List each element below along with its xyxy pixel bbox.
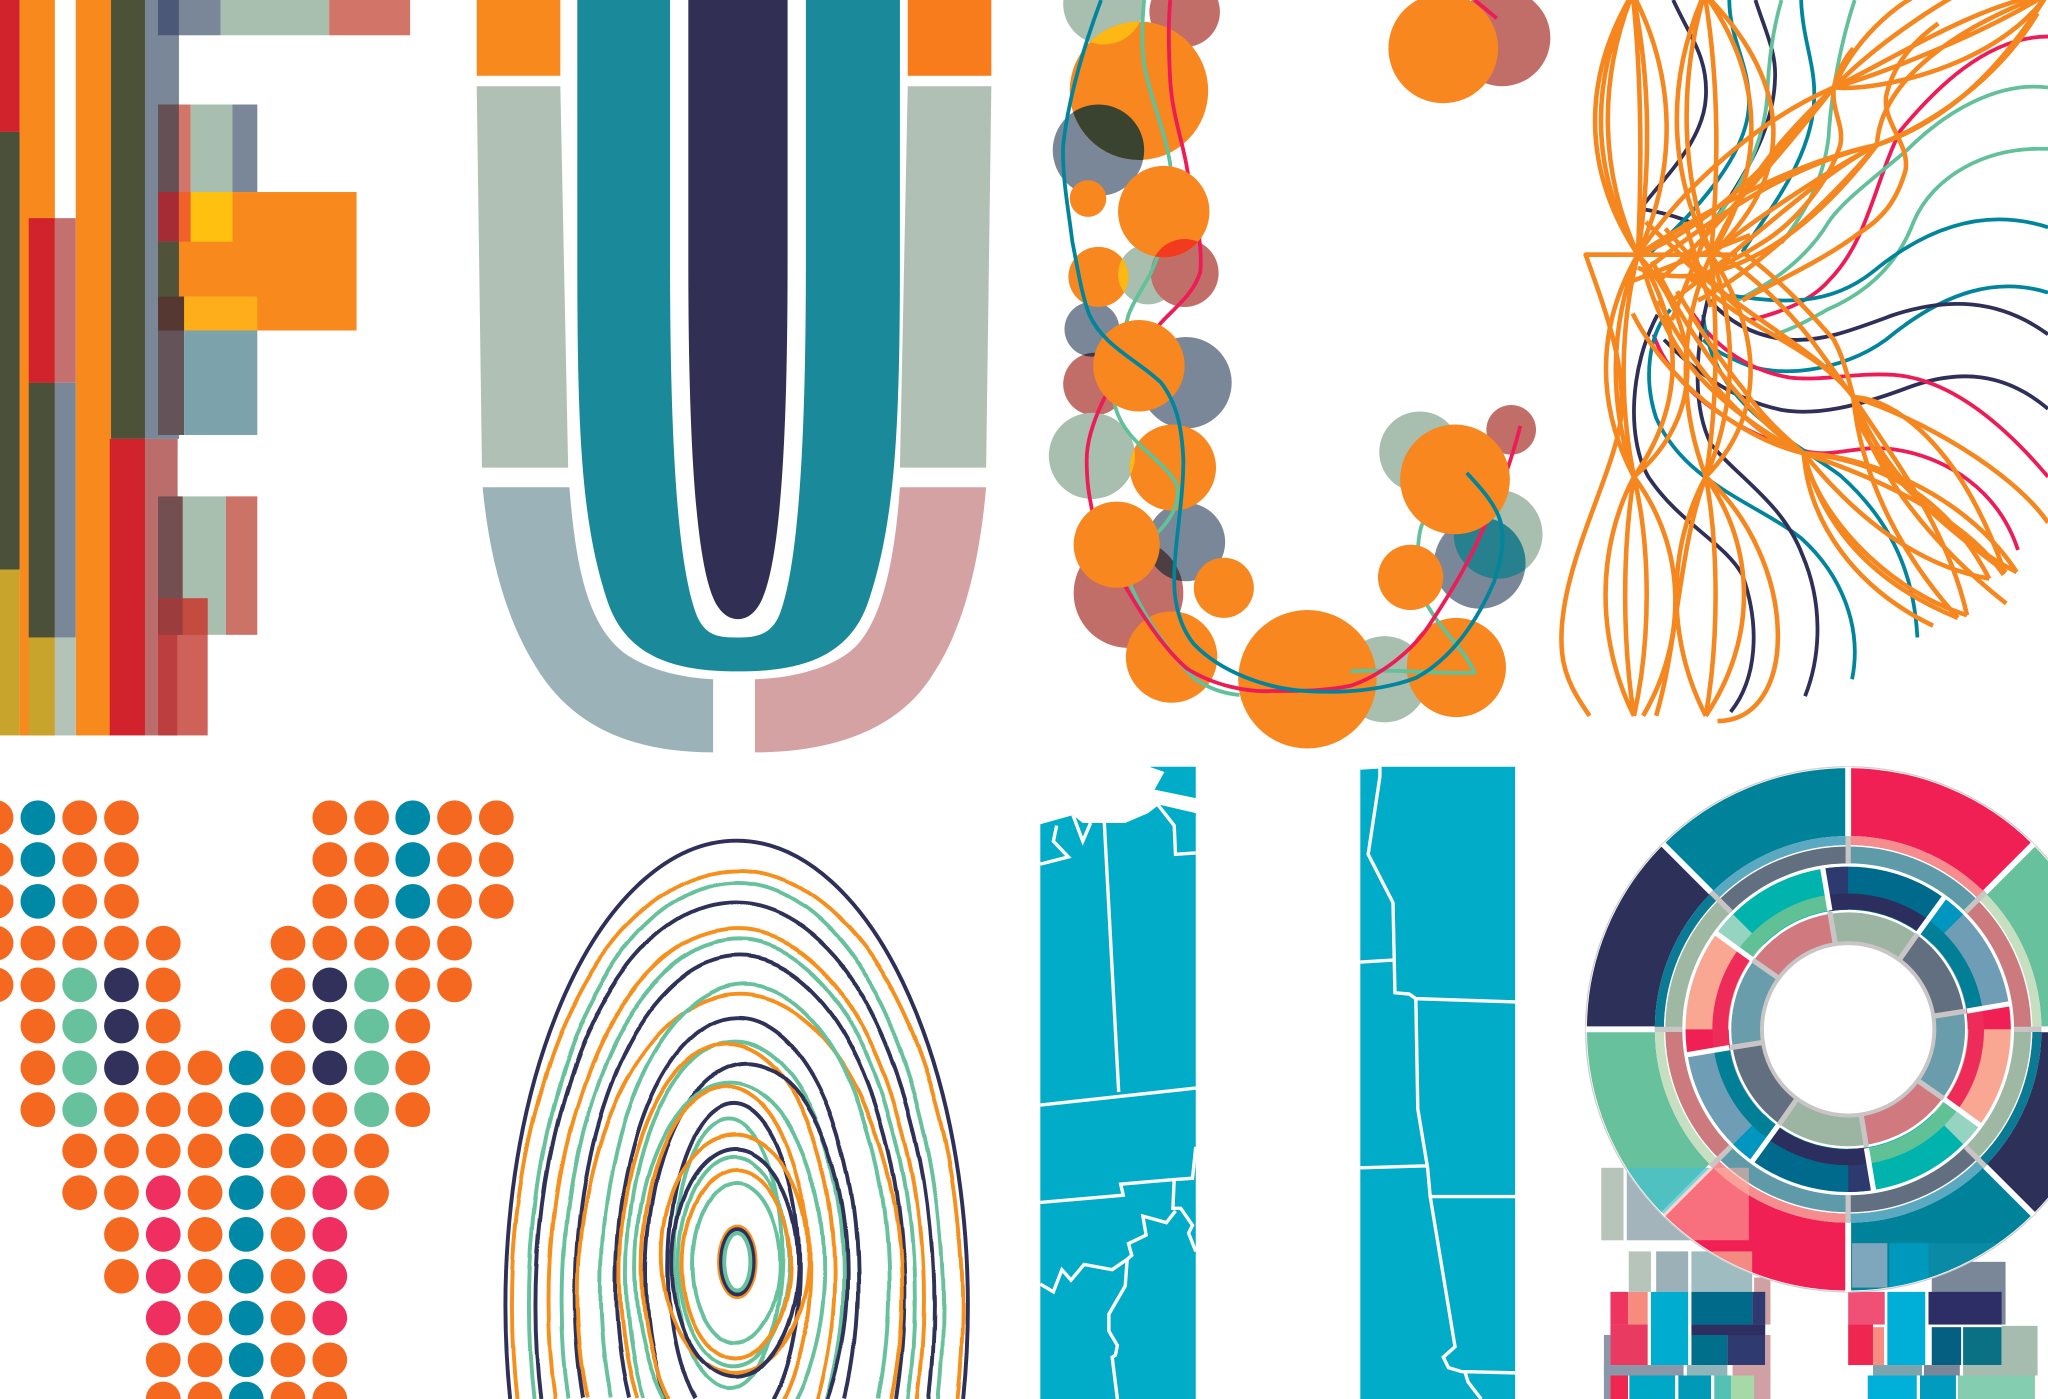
innermost ring <box>1729 910 1967 1148</box>
pink dots <box>146 1175 347 1335</box>
letter C: bubble chart with trend lines <box>1049 0 1550 748</box>
letter K: braided flow lines <box>1561 0 2048 721</box>
coloured flow lines <box>1634 0 2048 712</box>
orange stem strands <box>1561 0 1778 721</box>
green dots <box>62 968 389 1127</box>
letter U: nested bands <box>477 0 991 752</box>
orange upper arm strands <box>1586 0 2048 320</box>
letter U final: radial sunburst chart <box>1585 766 2048 1292</box>
fourth ring accent bits <box>1651 832 2045 1226</box>
overlapping translucent rectangles on chart <box>1627 1168 2006 1288</box>
outer ring sectors <box>1527 708 2048 1351</box>
fourth ring inner band <box>1669 851 2027 1208</box>
letter U final: rectangular legs under the chart <box>1601 1168 2038 1399</box>
thin second ring <box>1581 762 2048 1296</box>
teal dots <box>21 800 430 1399</box>
letter U right stem: map of regions <box>1360 767 1515 1399</box>
letter Y: dot matrix <box>0 800 514 1399</box>
center hole <box>1762 943 1934 1116</box>
letter U left stem: map of regions <box>1040 767 1196 1399</box>
orange dots <box>0 800 514 1399</box>
dividers <box>1586 767 2048 1292</box>
third ring <box>1664 845 2032 1214</box>
letter O: contour rings <box>505 841 968 1399</box>
navy dots <box>104 968 347 1085</box>
orange lower arm strands <box>1633 248 2048 626</box>
letter F: stacked bar chart <box>0 0 410 735</box>
fourth ring outer band <box>1683 864 2013 1195</box>
